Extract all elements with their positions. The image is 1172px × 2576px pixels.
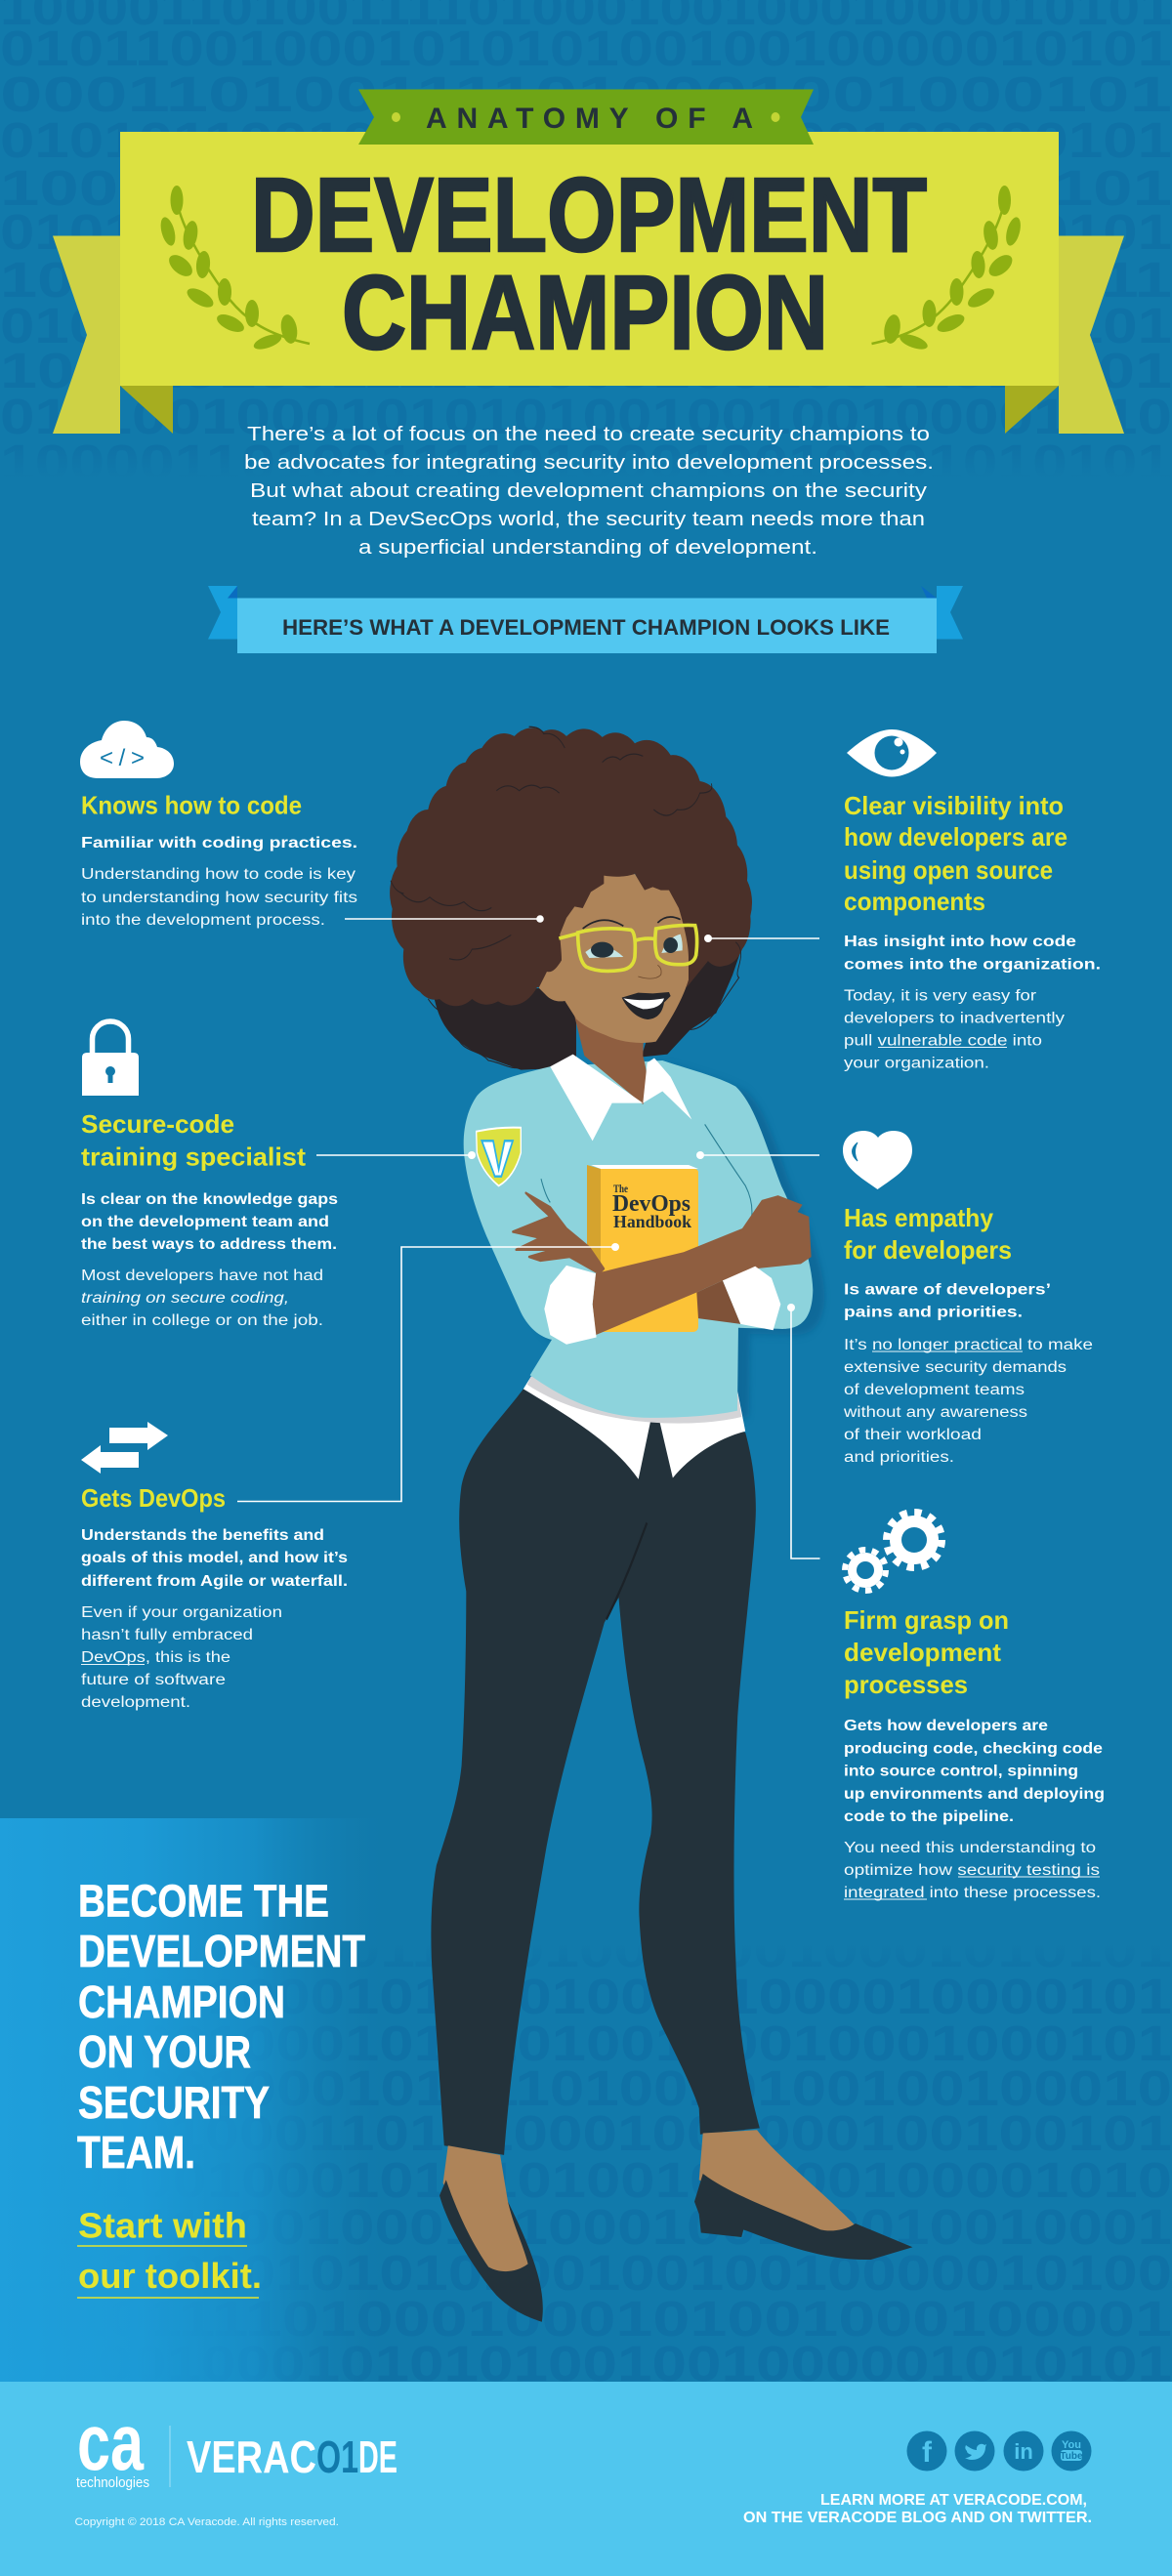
heading [844, 1205, 1012, 1265]
intro paragraph: There’s a lot of focus on the need to create security champions to [247, 423, 930, 445]
figure: development champion [390, 727, 912, 2322]
heading: development [844, 1640, 1001, 1667]
heading: Clear visibility into [844, 793, 1064, 820]
title banner [53, 90, 1124, 434]
lead: Has insight into how code [844, 934, 1076, 950]
body: to understanding how security fits [81, 890, 357, 906]
lead: Is aware of developers’ [844, 1281, 1051, 1299]
binary pattern: bottom: 1000011010011110100010010001010101 [0, 1922, 1172, 1977]
icon: cloud code [80, 721, 174, 778]
CTA headline: ON YOUR [78, 2026, 251, 2077]
hair curls [391, 727, 741, 1068]
body: of development teams [844, 1382, 1025, 1398]
heading [81, 1111, 306, 1172]
icon: youtube: You [1062, 2439, 1081, 2451]
callout line: clear visibility [704, 935, 819, 942]
heading: Gets DevOps [81, 1485, 226, 1513]
CA technologies logo: ca [77, 2398, 145, 2487]
binary pattern: bottom: 1110010001010101001001000001010101 [0, 2336, 1172, 2391]
subhead ribbon [208, 586, 963, 653]
icon: padlock [82, 1021, 139, 1096]
binary pattern: top: 0101100100010101010010010000010101 [0, 298, 1172, 353]
CTA headline: TEAM. [77, 2127, 195, 2178]
binary pattern: bottom [0, 1914, 1172, 2391]
learn more text [743, 2492, 1092, 2526]
body: Most developers have not had [81, 1267, 323, 1284]
binary pattern: top [0, 0, 1172, 498]
lead: on the development team and [81, 1214, 329, 1230]
heading: Secure-code [81, 1111, 234, 1139]
right ankle [699, 2130, 859, 2238]
book title [612, 1182, 691, 1231]
body: either in college or on the job. [81, 1312, 323, 1329]
eyes [585, 946, 623, 958]
book [587, 1165, 698, 1332]
CTA headline [77, 1875, 365, 2178]
book title: DevOps [612, 1191, 691, 1217]
lead: Familiar with coding practices. [81, 835, 357, 852]
laurel: left [158, 186, 310, 353]
body: Today, it is very easy for [844, 988, 1036, 1004]
callout line: empathy [696, 1151, 819, 1159]
CTA headline: DEVELOPMENT [78, 1926, 365, 1976]
callout line: secure-code [316, 1151, 476, 1159]
body [81, 1604, 282, 1711]
pants [431, 1389, 760, 2155]
laurel: right [871, 186, 1024, 353]
panel: secure-code training [81, 1021, 338, 1329]
body [843, 1337, 1093, 1466]
binary pattern: bottom: 1001001000101010100101000010000101 [0, 1969, 1172, 2024]
sweater shadow [476, 1066, 824, 1424]
body: future of software [81, 1672, 226, 1688]
icon: twitter [955, 2431, 994, 2471]
lead [844, 1281, 1051, 1320]
binary pattern: top: 0101100100010101010010010000010101 [0, 204, 1172, 260]
glasses [559, 925, 697, 971]
call to action [77, 1875, 365, 2298]
body: Understanding how to code is key [81, 866, 356, 883]
Veracode logo: VERAC [187, 2431, 316, 2482]
banner face [120, 132, 1059, 386]
hair back layer [433, 931, 744, 1070]
body: development. [81, 1694, 190, 1711]
icon: facebook: f [922, 2436, 933, 2469]
intro paragraph: be advocates for integrating security into development processes. [244, 451, 934, 474]
intro paragraph: But what about creating development champions on the security [250, 479, 928, 502]
callout line: gets devops [237, 1243, 619, 1502]
face [539, 874, 697, 1043]
lead: Understands the benefits and [81, 1527, 324, 1544]
CTA link [77, 2205, 262, 2298]
body: your organization. [844, 1055, 989, 1072]
ribbon tails [208, 586, 963, 639]
right cuff [723, 1267, 780, 1330]
legs and shoes [440, 2130, 912, 2322]
nose [638, 965, 661, 978]
body: hasn’t fully embraced [81, 1627, 253, 1643]
kicker text: ANATOMY OF A [426, 103, 753, 135]
binary pattern: top: 10011010011110100010010001010101 [0, 343, 1172, 398]
heading: processes [844, 1672, 968, 1699]
lead: into source control, spinning [844, 1764, 1078, 1779]
main forearm and fist [593, 1195, 812, 1335]
lead: Is clear on the knowledge gaps [81, 1191, 338, 1208]
lead: code to the pipeline. [844, 1808, 1014, 1825]
CTA headline: BECOME THE [78, 1875, 329, 1926]
body: of their workload [844, 1427, 982, 1443]
hair [390, 727, 752, 1006]
green kicker banner [358, 90, 814, 145]
lead: the best ways to address them. [81, 1236, 337, 1253]
banner left fold [120, 386, 173, 434]
title line 2: CHAMPION [342, 253, 828, 371]
Veracode logo: O1 [316, 2431, 358, 2482]
ribbon folds [228, 586, 937, 598]
callout line: firm grasp [787, 1304, 820, 1558]
right shoe [694, 2174, 912, 2260]
lead: up environments and deploying [844, 1786, 1105, 1803]
heading [844, 1607, 1009, 1699]
book title: The [613, 1182, 628, 1195]
kicker dot right [772, 112, 779, 122]
panel: clear visibility [844, 729, 1101, 1072]
intro paragraph: a superficial understanding of development. [358, 536, 817, 559]
heading: Has empathy [844, 1205, 994, 1232]
binary pattern: bottom: 01101111010001000101001000100001 [0, 2291, 1172, 2347]
binary pattern: bottom: 1001001000101010100100100100001010 [0, 2152, 1172, 2208]
binary pattern: top: 100100011110100010010001010101 [0, 160, 1172, 216]
binary pattern: top: 0111001000101010100100100100001010 [0, 389, 1172, 444]
body: into the development process. [81, 912, 325, 929]
heading: for developers [844, 1237, 1012, 1265]
heading: Knows how to code [81, 793, 302, 820]
icon: youtube [1051, 2431, 1092, 2471]
intro paragraph [244, 423, 934, 559]
heading: Firm grasp on [844, 1607, 1009, 1635]
body: pull vulnerable code into [844, 1033, 1042, 1049]
binary pattern: top: 10001101001111010001001000101011 [0, 252, 1172, 308]
body [81, 866, 357, 929]
lead: different from Agile or waterfall. [81, 1573, 348, 1590]
sweater [464, 1060, 813, 1418]
footer band [0, 2382, 1172, 2576]
book title: Handbook [613, 1212, 691, 1231]
body: It’s no longer practical to make [844, 1337, 1093, 1353]
left cuff [544, 1266, 597, 1345]
body [844, 1840, 1101, 1901]
book spine [587, 1165, 601, 1269]
arms and cuffs [513, 1193, 812, 1345]
lead: producing code, checking code [844, 1740, 1103, 1758]
CTA panel background [0, 1818, 391, 2383]
lead [844, 934, 1101, 973]
binary pattern: bottom: 1001001000101011010010100100100010 [0, 2060, 1172, 2116]
lead: pains and priorities. [844, 1305, 1023, 1320]
binary pattern: bottom: 1010100010101010010010010000010100 [0, 2245, 1172, 2301]
panel: gets devops [81, 1422, 348, 1711]
CA technologies logo: technologies [76, 2474, 149, 2491]
icon: heart [843, 1131, 912, 1189]
binary pattern: bottom: 0100111001000101000100100010010001 [0, 2199, 1172, 2255]
body: Even if your organization [81, 1604, 282, 1621]
icon: linkedin [1004, 2431, 1043, 2471]
body: optimize how security testing is [844, 1862, 1100, 1879]
ribbon face [237, 598, 937, 653]
learn more text: LEARN MORE AT VERACODE.COM, [820, 2492, 1087, 2509]
left shoe [440, 2180, 543, 2322]
icon: cloud code: </> [100, 745, 145, 771]
CTA link: our toolkit. [78, 2256, 262, 2296]
lower forearm [696, 1280, 740, 1324]
binary pattern: top: 0101011001000101010100100100000101 [0, 112, 1172, 168]
binary pattern: bottom: 0101001000101010100100010001000101 [0, 2015, 1172, 2071]
collar [550, 1055, 691, 1141]
lead [81, 1191, 338, 1253]
panel: firm grasp [844, 1513, 1105, 1901]
banner right fold [1005, 386, 1059, 434]
neck [569, 997, 648, 1104]
CTA headline: SECURITY [78, 2077, 270, 2128]
panel: knows how to code [80, 721, 357, 929]
icon: gears [845, 1513, 942, 1591]
left ankle [443, 2145, 531, 2276]
body: DevOps, this is the [81, 1649, 230, 1666]
banner right tail [1059, 236, 1124, 434]
logo separator [169, 2426, 171, 2487]
body: developers to inadvertently [844, 1010, 1065, 1027]
lead [81, 1527, 348, 1590]
binary pattern: top: 1000011010011110100010010001010101 [0, 435, 1172, 490]
banner left tail [53, 236, 120, 434]
binary pattern: top: 0001101001111010001001000101 [0, 66, 1172, 122]
lower hand with fingers [513, 1193, 604, 1273]
CTA link: Start with [78, 2205, 247, 2246]
body: extensive security demands [844, 1359, 1067, 1376]
heading [844, 793, 1067, 916]
kicker dot left [392, 112, 400, 122]
shirt tail [523, 1377, 745, 1479]
callout line: knows how to code [345, 915, 544, 923]
intro paragraph: team? In a DevSecOps world, the security team needs more than [252, 508, 925, 530]
book pages top [591, 1165, 698, 1169]
eyebrows [583, 917, 681, 929]
mouth [622, 992, 671, 1019]
body: training on secure coding, [81, 1290, 289, 1307]
heading: training specialist [81, 1144, 306, 1172]
panel: empathy [843, 1131, 1093, 1466]
heading: components [844, 889, 985, 916]
icon: eye [847, 729, 937, 777]
icon: swap arrows [81, 1422, 168, 1474]
icon: facebook [906, 2431, 947, 2471]
footer [0, 2382, 1172, 2576]
Veracode logo: DE [358, 2431, 398, 2482]
lead: comes into the organization. [844, 957, 1101, 973]
icon: youtube: Tube [1060, 2451, 1083, 2462]
body: integrated into these processes. [844, 1885, 1101, 1901]
lead: goals of this model, and how it’s [81, 1550, 348, 1566]
book cover [601, 1169, 698, 1332]
body: and priorities. [844, 1449, 954, 1466]
sweater fold lines [541, 1124, 752, 1226]
learn more text: ON THE VERACODE BLOG AND ON TWITTER. [743, 2510, 1092, 2526]
binary pattern: top: 0101100100010101010010010000010101 [0, 21, 1172, 76]
body: without any awareness [843, 1404, 1027, 1421]
body: You need this understanding to [844, 1840, 1096, 1856]
shield badge [477, 1128, 521, 1185]
heading: using open source [844, 857, 1053, 885]
heading: how developers are [844, 824, 1067, 852]
body [844, 988, 1065, 1072]
lead: Gets how developers are [844, 1718, 1048, 1734]
lead [844, 1718, 1105, 1825]
CTA headline: CHAMPION [78, 1976, 285, 2027]
copyright: Copyright © 2018 CA Veracode. All rights reserved. [74, 2516, 339, 2528]
body [81, 1267, 323, 1329]
binary pattern: bottom: 0110010001101010001001000100100101 [0, 2105, 1172, 2161]
ribbon text: HERE’S WHAT A DEVELOPMENT CHAMPION LOOKS LIKE [282, 615, 890, 640]
title line 1: DEVELOPMENT [251, 155, 927, 273]
icon: linkedin: in [1014, 2439, 1033, 2464]
